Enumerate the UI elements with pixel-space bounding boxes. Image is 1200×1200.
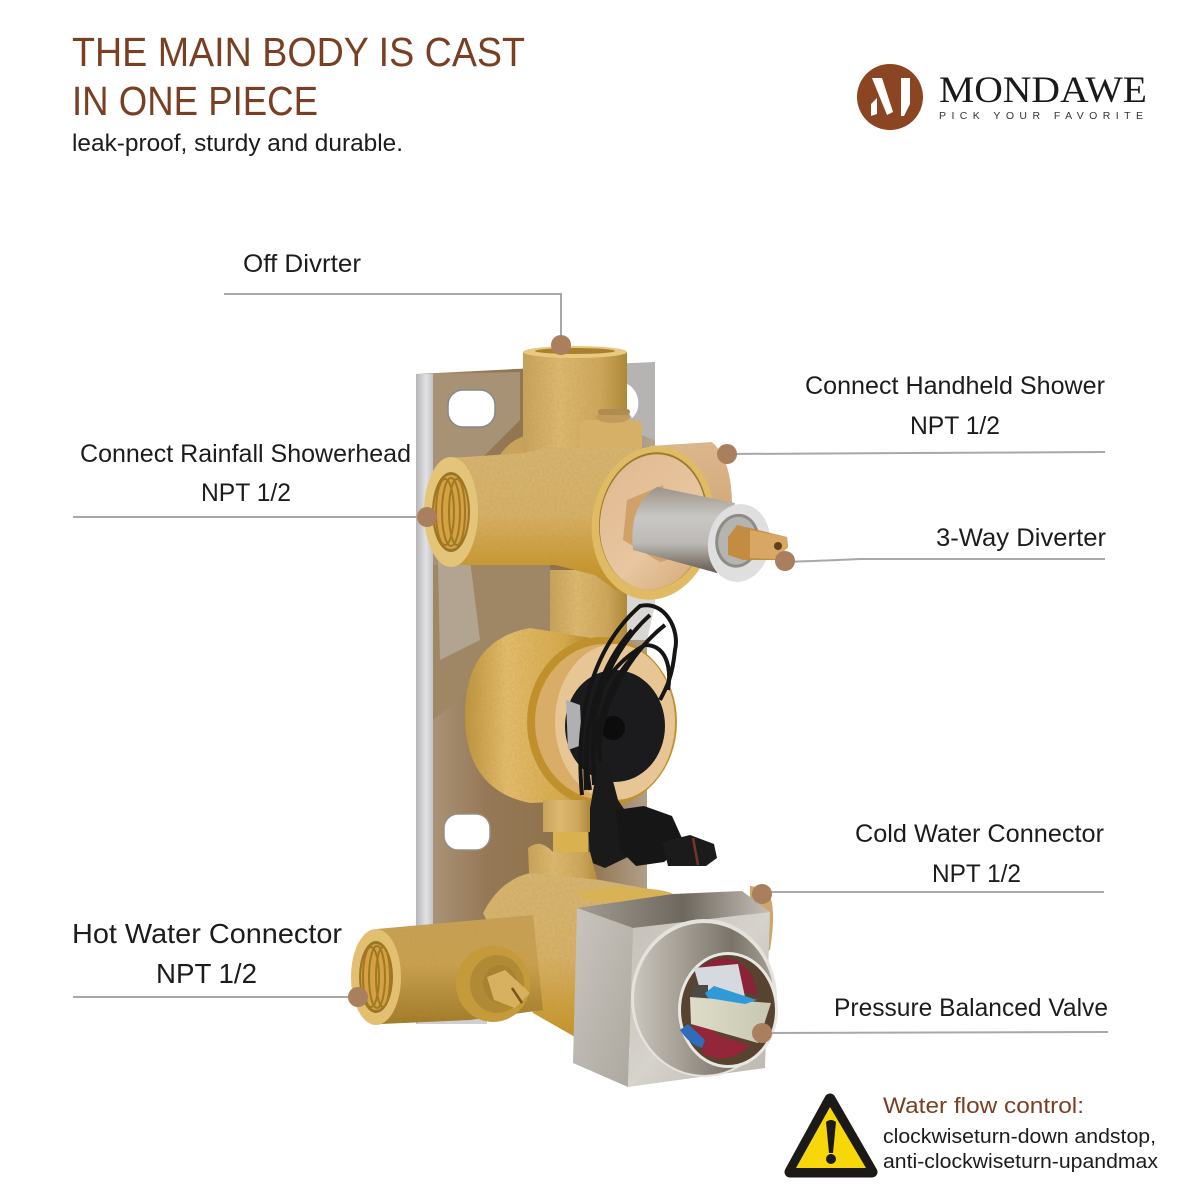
callout: connect handheld shower: [717, 372, 1105, 464]
right rear port: [650, 442, 732, 530]
square trim: [573, 891, 770, 1087]
callout: off diverter: [224, 250, 571, 355]
note: water flow control: anti-clockwiseturn-upandmax: [883, 1151, 1158, 1173]
logo tagline: PICK YOUR FAVORITE: [939, 110, 1143, 122]
thermostatic cylinder: [465, 628, 677, 807]
callout: pressure balanced valve: [752, 994, 1108, 1043]
top outlet neck: [500, 346, 642, 460]
valve illustration: [351, 346, 788, 1087]
rainfall outlet port: [424, 457, 478, 567]
icon: warning triangle: [790, 1099, 872, 1172]
callout: 3-way diverter: [775, 524, 1106, 571]
callout: 3-way diverter: 3-Way Diverter: [936, 524, 1106, 552]
callout: cold water connector: NPT 1/2: [932, 860, 1021, 888]
hex nut: [623, 485, 668, 562]
callout: connect handheld shower: NPT 1/2: [910, 412, 1000, 440]
mounting plate: [416, 362, 655, 1024]
callout: cold water connector: Cold Water Connector: [855, 820, 1104, 848]
callout: hot water connector: [72, 918, 368, 1007]
subtitle: leak-proof, sturdy and durable.: [72, 130, 403, 157]
wires and plug: [580, 605, 717, 868]
upper cross body: [450, 448, 660, 595]
logo mark: [857, 64, 923, 130]
note: water flow control: clockwiseturn-down andstop,: [883, 1126, 1156, 1148]
cold water port: [750, 886, 773, 960]
callout: hot water connector: NPT 1/2: [156, 958, 257, 989]
callout: connect rainfall showerhead: Connect Rainfall Showerhead: [80, 440, 411, 468]
title: THE MAIN BODY IS CAST: [72, 29, 525, 75]
note: water flow control: Water flow control:: [883, 1093, 1084, 1118]
lower coupling: [528, 800, 600, 895]
diverter stem: [632, 487, 788, 586]
title: IN ONE PIECE: [72, 78, 318, 124]
logo: Mondawe: [857, 64, 1147, 130]
hot water port: [351, 915, 543, 1025]
lower brass neck: [550, 570, 627, 645]
callout: off diverter: Off Divrter: [243, 250, 361, 278]
callout: connect rainfall showerhead: NPT 1/2: [201, 479, 291, 507]
callout: connect handheld shower: Connect Handheld Shower: [805, 372, 1105, 400]
side screw: [456, 946, 530, 1022]
logo wordmark: MONDAWE: [939, 70, 1147, 111]
lower dome body: [483, 873, 700, 1060]
title: [72, 29, 525, 124]
front disc and black cartridge: [555, 644, 675, 800]
diverter flange: [582, 438, 724, 608]
callout: hot water connector: Hot Water Connector: [72, 918, 342, 949]
callout: pressure balanced valve: Pressure Balanced Valve: [834, 994, 1108, 1022]
bowl and cartridge: [631, 919, 778, 1077]
callout: connect rainfall showerhead: [73, 440, 437, 527]
note: water flow control: [883, 1093, 1158, 1173]
callout: cold water connector: [752, 820, 1104, 904]
